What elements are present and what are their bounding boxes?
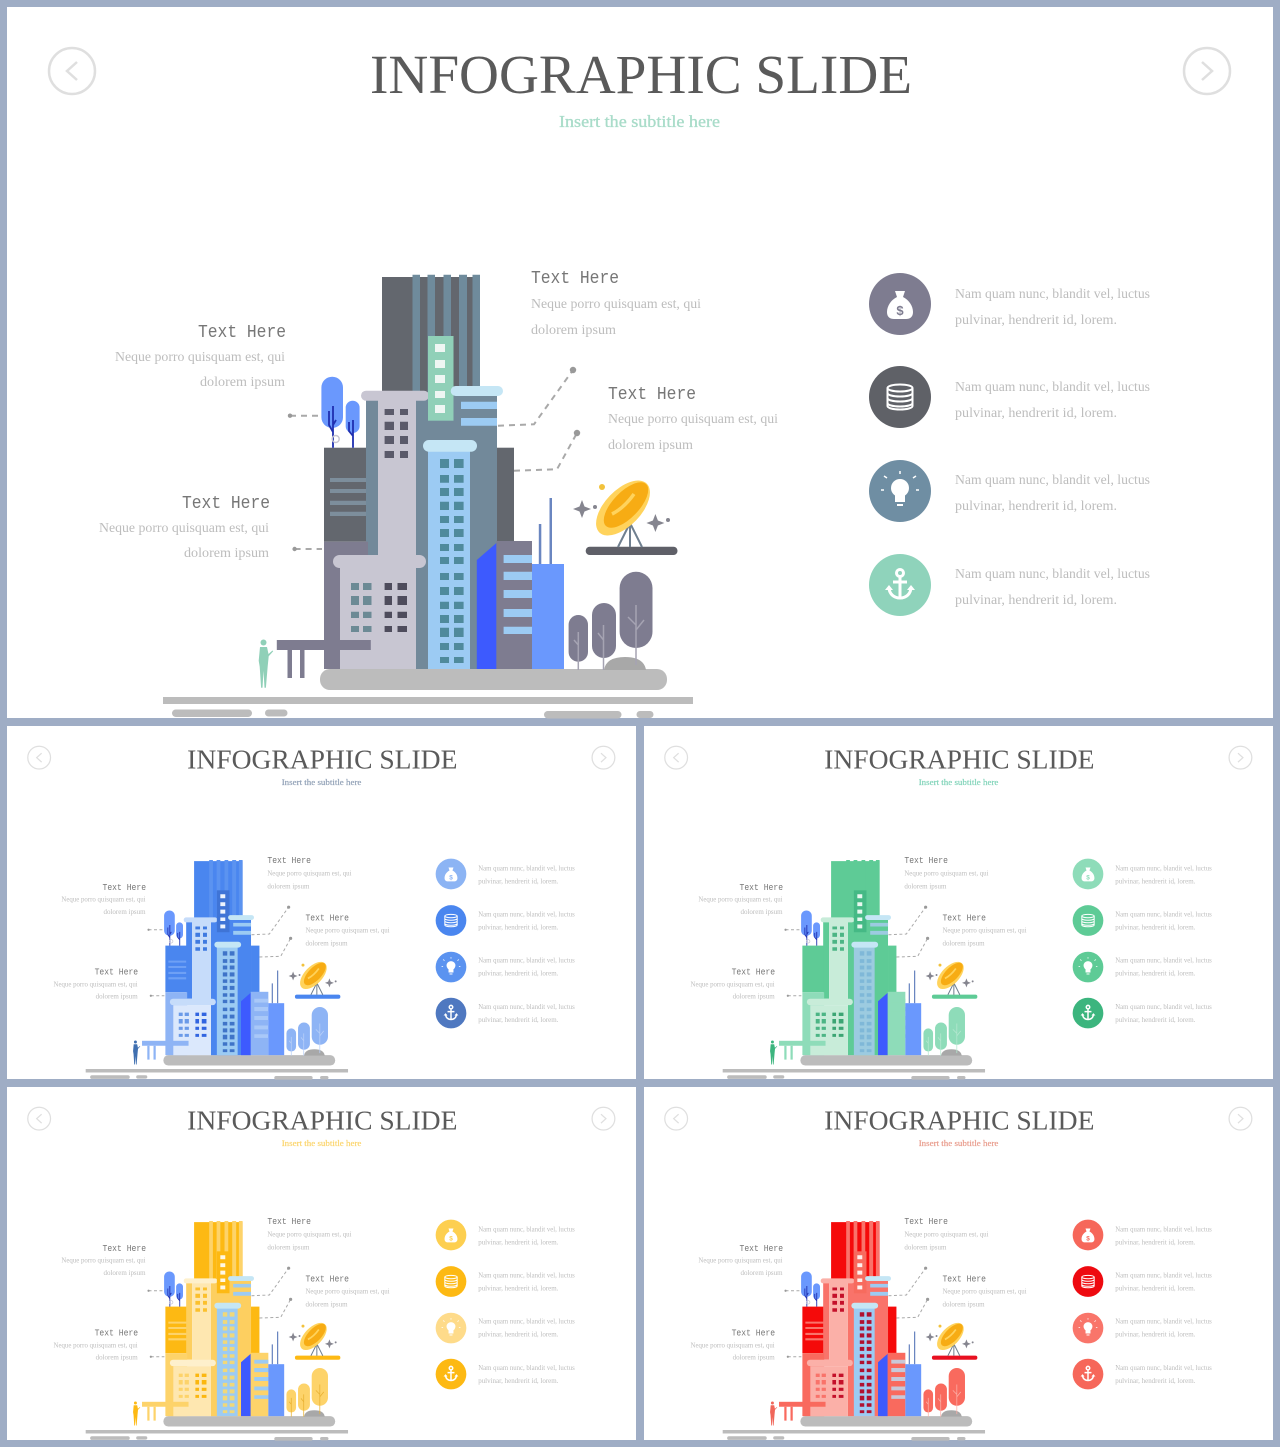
subtitle: Insert the subtitle here bbox=[559, 112, 720, 131]
red slide text list: Nam quam nunc, blandit vel, luctus bbox=[1115, 1227, 1212, 1234]
blue slide callouts: Neque porro quisquam est, qui bbox=[61, 897, 146, 904]
blue slide text list: pulvinar, hendrerit id, lorem. bbox=[478, 924, 559, 931]
panel: blue slide background bbox=[7, 726, 636, 1079]
text block: item 4: pulvinar, hendrerit id, lorem. bbox=[955, 593, 1117, 608]
icon: previous arrow bbox=[49, 48, 95, 94]
blue wedge bbox=[477, 543, 496, 669]
striped roof block bbox=[451, 386, 503, 426]
text block: item 4: Nam quam nunc, blandit vel, luctus bbox=[955, 567, 1150, 582]
yellow slide text list: pulvinar, hendrerit id, lorem. bbox=[478, 1285, 559, 1292]
blue slide callouts: Neque porro quisquam est, qui bbox=[305, 927, 390, 934]
red slide text list: pulvinar, hendrerit id, lorem. bbox=[1115, 1285, 1196, 1292]
blue slide callouts: Text Here bbox=[95, 967, 138, 977]
callout: top: Text Here bbox=[531, 269, 619, 289]
red slide text list: pulvinar, hendrerit id, lorem. bbox=[1115, 1378, 1196, 1385]
blue slide text list: pulvinar, hendrerit id, lorem. bbox=[478, 878, 559, 885]
yellow slide text list: Nam quam nunc, blandit vel, luctus bbox=[478, 1227, 575, 1234]
panel: green slide background bbox=[644, 726, 1273, 1079]
red slide icons bbox=[1073, 1220, 1103, 1389]
panel: red slide background bbox=[644, 1087, 1273, 1440]
red slide callouts: Text Here bbox=[740, 1244, 783, 1254]
yellow slide content bbox=[28, 1106, 615, 1441]
yellow slide callouts: dolorem ipsum bbox=[267, 1244, 310, 1251]
text block: item 2 bbox=[955, 380, 1150, 421]
green slide callouts: dolorem ipsum bbox=[733, 994, 775, 1001]
yellow slide arrows bbox=[28, 1107, 615, 1130]
green slide text list: pulvinar, hendrerit id, lorem. bbox=[1115, 924, 1196, 931]
blue slide callouts: dolorem ipsum bbox=[305, 940, 348, 947]
ground and base bbox=[163, 669, 693, 718]
green slide callouts: dolorem ipsum bbox=[741, 909, 783, 916]
strip tower bbox=[428, 336, 454, 421]
red slide callouts: Neque porro quisquam est, qui bbox=[691, 1342, 775, 1349]
yellow slide subtitle: Insert the subtitle here bbox=[282, 1139, 362, 1148]
yellow slide callouts: Neque porro quisquam est, qui bbox=[61, 1258, 146, 1265]
icon: next arrow bbox=[1184, 48, 1230, 94]
yellow slide building bbox=[86, 1221, 348, 1441]
callout: top: Neque porro quisquam est, qui bbox=[531, 297, 701, 312]
slide: blue variant bbox=[7, 726, 636, 1080]
blue slide callouts: Text Here bbox=[103, 883, 146, 893]
text block: item 3 bbox=[955, 473, 1150, 514]
blue slide content bbox=[28, 745, 615, 1080]
illustration: city building bbox=[163, 275, 693, 718]
callout: top: dolorem ipsum bbox=[531, 323, 616, 338]
green slide text list: Nam quam nunc, blandit vel, luctus bbox=[1115, 912, 1212, 919]
yellow slide text list bbox=[478, 1227, 575, 1385]
green slide icons bbox=[1073, 859, 1103, 1028]
red slide text list: pulvinar, hendrerit id, lorem. bbox=[1115, 1239, 1196, 1246]
icon: anchor bbox=[869, 554, 931, 616]
yellow slide callouts: dolorem ipsum bbox=[305, 1301, 348, 1308]
text block: item 3: pulvinar, hendrerit id, lorem. bbox=[955, 499, 1117, 514]
yellow slide text list: Nam quam nunc, blandit vel, luctus bbox=[478, 1319, 575, 1326]
green slide callouts: Neque porro quisquam est, qui bbox=[691, 981, 775, 988]
red slide content bbox=[665, 1106, 1252, 1441]
red slide callouts: Neque porro quisquam est, qui bbox=[698, 1258, 783, 1265]
red slide callouts: Neque porro quisquam est, qui bbox=[904, 1231, 989, 1238]
rear side blocks bbox=[324, 448, 514, 542]
callout: left top: Text Here bbox=[198, 323, 286, 343]
green slide callouts: Text Here bbox=[942, 914, 986, 924]
green slide text list: Nam quam nunc, blandit vel, luctus bbox=[1115, 866, 1212, 873]
green slide text list: pulvinar, hendrerit id, lorem. bbox=[1115, 878, 1196, 885]
red slide callouts: Neque porro quisquam est, qui bbox=[942, 1288, 1027, 1295]
red slide text list bbox=[1115, 1227, 1212, 1385]
yellow slide callouts: Text Here bbox=[103, 1244, 146, 1254]
red slide text list: pulvinar, hendrerit id, lorem. bbox=[1115, 1331, 1196, 1338]
lower-left block bbox=[324, 542, 426, 669]
icon: light bulb bbox=[869, 460, 931, 522]
icon: money bag bbox=[869, 273, 931, 335]
yellow slide title: INFOGRAPHIC SLIDE bbox=[187, 1106, 457, 1136]
red slide text list: Nam quam nunc, blandit vel, luctus bbox=[1115, 1319, 1212, 1326]
red slide callouts: dolorem ipsum bbox=[942, 1301, 985, 1308]
green slide callouts: Neque porro quisquam est, qui bbox=[698, 897, 783, 904]
callout: left top: dolorem ipsum bbox=[200, 375, 285, 390]
blue slide text list: Nam quam nunc, blandit vel, luctus bbox=[478, 866, 575, 873]
red slide title: INFOGRAPHIC SLIDE bbox=[824, 1106, 1094, 1136]
green slide arrows bbox=[665, 746, 1252, 769]
yellow slide callouts: Neque porro quisquam est, qui bbox=[267, 1231, 352, 1238]
text block: item 4 bbox=[955, 567, 1150, 608]
green slide text list bbox=[1115, 866, 1212, 1024]
central blue-grey block bbox=[361, 391, 497, 669]
text block: item 2: pulvinar, hendrerit id, lorem. bbox=[955, 406, 1117, 421]
text block: item 2: Nam quam nunc, blandit vel, luctus bbox=[955, 380, 1150, 395]
icon: money bag: $ bbox=[896, 303, 904, 318]
yellow slide callouts: dolorem ipsum bbox=[96, 1355, 138, 1362]
red slide callouts: Text Here bbox=[904, 1217, 948, 1227]
red slide callouts bbox=[691, 1217, 1027, 1362]
red slide callouts: dolorem ipsum bbox=[741, 1270, 783, 1277]
blue slide title: INFOGRAPHIC SLIDE bbox=[187, 745, 457, 775]
blue slide callouts: Text Here bbox=[305, 914, 349, 924]
green slide callouts: Neque porro quisquam est, qui bbox=[904, 870, 989, 877]
icon: coin stack bbox=[869, 366, 931, 428]
slide: main grey variant bbox=[7, 7, 1273, 718]
bench bbox=[277, 640, 371, 678]
green slide text list: pulvinar, hendrerit id, lorem. bbox=[1115, 970, 1196, 977]
yellow slide callouts: Text Here bbox=[305, 1275, 349, 1285]
street trees bbox=[569, 572, 652, 670]
blue slide callouts bbox=[54, 856, 390, 1001]
callout: right: dolorem ipsum bbox=[608, 438, 693, 453]
yellow slide callouts: Text Here bbox=[267, 1217, 311, 1227]
red slide arrows bbox=[665, 1107, 1252, 1130]
yellow slide text list: Nam quam nunc, blandit vel, luctus bbox=[478, 1365, 575, 1372]
callout: left bottom: Neque porro quisquam est, qui bbox=[99, 521, 269, 536]
person bbox=[259, 640, 273, 688]
red slide subtitle: Insert the subtitle here bbox=[919, 1139, 999, 1148]
green slide callouts: Text Here bbox=[740, 883, 783, 893]
callout: right: Neque porro quisquam est, qui bbox=[608, 412, 778, 427]
blue slide text list: Nam quam nunc, blandit vel, luctus bbox=[478, 958, 575, 965]
yellow slide callouts: Neque porro quisquam est, qui bbox=[54, 1342, 138, 1349]
callout: left bottom: dolorem ipsum bbox=[184, 546, 269, 561]
yellow slide icons bbox=[436, 1220, 466, 1389]
yellow slide callouts: Text Here bbox=[95, 1328, 138, 1338]
roof trees bbox=[321, 377, 360, 448]
yellow slide text list: pulvinar, hendrerit id, lorem. bbox=[478, 1331, 559, 1338]
red slide callouts: Text Here bbox=[732, 1328, 775, 1338]
text block: item 3: Nam quam nunc, blandit vel, luctus bbox=[955, 473, 1150, 488]
blue slide text list: pulvinar, hendrerit id, lorem. bbox=[478, 970, 559, 977]
red slide building bbox=[723, 1221, 985, 1441]
callout: left bottom bbox=[99, 494, 270, 561]
blue slide callouts: Text Here bbox=[267, 856, 311, 866]
callout: top bbox=[531, 269, 701, 338]
green slide text list: Nam quam nunc, blandit vel, luctus bbox=[1115, 958, 1212, 965]
panel: yellow slide background bbox=[7, 1087, 636, 1440]
blue slide arrows bbox=[28, 746, 615, 769]
text block: item 1: pulvinar, hendrerit id, lorem. bbox=[955, 313, 1117, 328]
yellow slide callouts: dolorem ipsum bbox=[104, 1270, 146, 1277]
red slide text list: Nam quam nunc, blandit vel, luctus bbox=[1115, 1365, 1212, 1372]
blue block with antennas bbox=[532, 498, 564, 669]
green slide text list: Nam quam nunc, blandit vel, luctus bbox=[1115, 1004, 1212, 1011]
light-blue tower bbox=[423, 440, 477, 669]
blue slide building bbox=[86, 860, 348, 1080]
connector dots bbox=[288, 367, 580, 551]
yellow slide text list: pulvinar, hendrerit id, lorem. bbox=[478, 1378, 559, 1385]
yellow slide callouts bbox=[54, 1217, 390, 1362]
rear tower with columns bbox=[382, 275, 480, 397]
red slide text list: Nam quam nunc, blandit vel, luctus bbox=[1115, 1273, 1212, 1280]
green slide subtitle: Insert the subtitle here bbox=[919, 778, 999, 787]
slide: red variant bbox=[644, 1087, 1273, 1441]
callout: right bbox=[608, 385, 778, 453]
title: INFOGRAPHIC SLIDE bbox=[370, 44, 912, 105]
right striped block bbox=[496, 541, 532, 669]
red slide callouts: dolorem ipsum bbox=[733, 1355, 775, 1362]
blue slide callouts: Neque porro quisquam est, qui bbox=[54, 981, 138, 988]
yellow slide callouts: Neque porro quisquam est, qui bbox=[305, 1288, 390, 1295]
green slide callouts: Text Here bbox=[732, 967, 775, 977]
blue slide icons bbox=[436, 859, 466, 1028]
red slide callouts: Text Here bbox=[942, 1275, 986, 1285]
red slide callouts: dolorem ipsum bbox=[904, 1244, 947, 1251]
blue slide text list: Nam quam nunc, blandit vel, luctus bbox=[478, 912, 575, 919]
callout: right: Text Here bbox=[608, 385, 696, 405]
blue slide text list: Nam quam nunc, blandit vel, luctus bbox=[478, 1004, 575, 1011]
text block: item 1 bbox=[955, 287, 1150, 328]
blue slide text list bbox=[478, 866, 575, 1024]
green slide text list: pulvinar, hendrerit id, lorem. bbox=[1115, 1017, 1196, 1024]
green slide callouts: Text Here bbox=[904, 856, 948, 866]
green slide callouts: dolorem ipsum bbox=[904, 883, 947, 890]
blue slide callouts: dolorem ipsum bbox=[267, 883, 310, 890]
yellow slide text list: Nam quam nunc, blandit vel, luctus bbox=[478, 1273, 575, 1280]
satellite dish bbox=[573, 471, 678, 555]
blue slide callouts: dolorem ipsum bbox=[104, 909, 146, 916]
callout: left top: Neque porro quisquam est, qui bbox=[115, 350, 285, 365]
green slide building bbox=[723, 860, 985, 1080]
yellow slide text list: pulvinar, hendrerit id, lorem. bbox=[478, 1239, 559, 1246]
green slide content bbox=[665, 745, 1252, 1080]
slide: green variant bbox=[644, 726, 1273, 1080]
text block: item 1: Nam quam nunc, blandit vel, luctus bbox=[955, 287, 1150, 302]
panel: main slide background bbox=[7, 7, 1273, 718]
blue slide subtitle: Insert the subtitle here bbox=[282, 778, 362, 787]
green slide callouts: Neque porro quisquam est, qui bbox=[942, 927, 1027, 934]
blue slide text list: pulvinar, hendrerit id, lorem. bbox=[478, 1017, 559, 1024]
callout: left bottom: Text Here bbox=[182, 494, 270, 514]
connector lines bbox=[290, 370, 577, 549]
green slide title: INFOGRAPHIC SLIDE bbox=[824, 745, 1094, 775]
green slide callouts bbox=[691, 856, 1027, 1001]
green slide callouts: dolorem ipsum bbox=[942, 940, 985, 947]
callout: left top bbox=[115, 323, 286, 390]
slide: yellow variant bbox=[7, 1087, 636, 1441]
blue slide callouts: dolorem ipsum bbox=[96, 994, 138, 1001]
blue slide callouts: Neque porro quisquam est, qui bbox=[267, 870, 352, 877]
